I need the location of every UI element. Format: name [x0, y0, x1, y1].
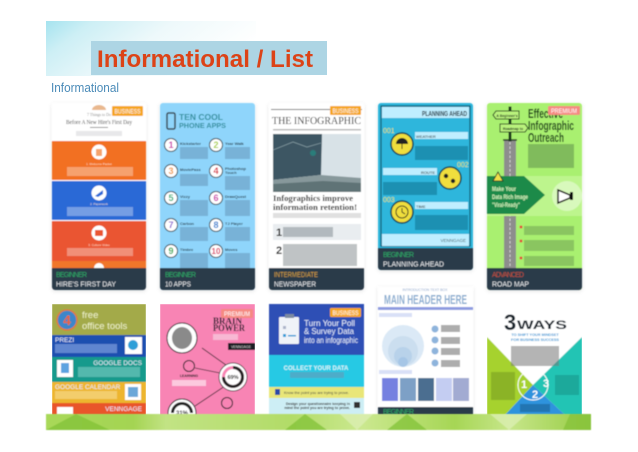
panel: brain power: BRAIN — [213, 317, 242, 327]
title: Informational / List — [97, 46, 313, 73]
icons — [92, 144, 106, 240]
panel: road map: Roadmap to — [503, 127, 523, 131]
panel: 10 apps: TEN COOL — [179, 112, 223, 122]
panel: office tools: PREZI — [55, 337, 74, 344]
panel: 10 apps: PHONE APPS — [179, 121, 226, 130]
panel: road map: A Beginner's — [496, 114, 518, 118]
panel: poll and survey: COLLECT YOUR DATA — [284, 366, 349, 372]
panel: hire's first day — [52, 103, 146, 290]
numbered list: 5 — [168, 193, 174, 203]
label bar: HIRE'S FIRST DAY — [56, 280, 116, 288]
panel: newspaper — [269, 103, 364, 290]
panel: 3 ways: 3 — [543, 378, 549, 390]
label bar: INTERMEDIATE — [274, 272, 318, 279]
label bar — [378, 248, 473, 270]
section heading: Informational — [51, 81, 119, 95]
numbered list: 2 — [213, 140, 219, 150]
panel: 10 apps: Photoshop — [225, 166, 246, 171]
panel: newspaper: THE INFOGRAPHIC — [272, 116, 361, 127]
header gradient background — [46, 21, 256, 76]
panel: newspaper: 2 — [276, 245, 282, 257]
panel: hire's first day: 7 Things to Do — [87, 112, 111, 117]
panel: 3 ways: WAYS — [517, 320, 567, 332]
panel: newspaper: information retention! — [273, 203, 357, 212]
panel: planning ahead: 002 — [457, 162, 469, 169]
tag: BUSINESS — [332, 310, 359, 317]
panel: planning ahead: TIME — [416, 204, 426, 209]
panel: planning ahead: VENNGAGE — [440, 238, 466, 243]
panel: hire's first day: 3. Culture Video — [88, 243, 110, 247]
panel: 3 ways: FOR BUSINESS SUCCESS — [511, 338, 559, 342]
panel: 10 apps: TJ Player — [225, 221, 243, 226]
arrow banner: Make Your — [492, 187, 517, 193]
panel: brain power — [160, 304, 255, 427]
panel: hire's first day: Before A New Hire's First Day — [66, 119, 133, 126]
panel: planning ahead: 003 — [383, 197, 395, 204]
panel: planning ahead: WEATHER — [416, 134, 436, 139]
arrow banner: Data Rich Image — [492, 195, 529, 201]
photo — [273, 134, 361, 192]
icon: umbrella — [391, 133, 413, 155]
panel: road map: Infographic — [528, 119, 574, 133]
label bar — [52, 268, 146, 290]
numbered list: 8 — [213, 220, 219, 230]
arrow banner — [487, 176, 545, 214]
tag: BUSINESS — [332, 108, 359, 115]
panel: 3 ways: 2 — [532, 389, 538, 401]
panel: 3 ways — [487, 305, 582, 415]
numbered list — [164, 138, 222, 258]
panel: 10 apps: MoviePass — [180, 167, 201, 172]
panel: poll and survey: Design your questionnaire keeping in — [286, 402, 350, 406]
donut: 31%: 31% — [176, 411, 189, 417]
panel: poll and survey — [269, 304, 364, 415]
panel: office tools: GOOGLE DOCS — [93, 360, 143, 367]
panel: planning ahead: 001 — [383, 128, 395, 135]
panel: road map — [487, 103, 582, 290]
panel: office tools: 4 — [63, 312, 71, 328]
panel: 10 apps — [160, 103, 255, 290]
panel: brain power: POWER — [213, 324, 245, 334]
donut: 69%: 69% — [227, 375, 239, 381]
panel: brain power: LEARNING — [180, 374, 198, 378]
tag: PREMIUM — [224, 311, 250, 318]
panel: newspaper: Infographics improve — [273, 194, 353, 203]
panel: 3 ways: TO SHIFT YOUR MINDSET — [511, 333, 559, 337]
numbered list: 7 — [168, 220, 174, 230]
panel: road map: Outreach — [528, 131, 564, 145]
numbered list: 1 — [168, 140, 174, 150]
panel: brain power: VENNGAGE — [231, 345, 252, 349]
footer green band — [46, 414, 591, 430]
label bar: BEGINNER — [165, 272, 196, 279]
icon: clock — [391, 201, 413, 223]
panel: main header: MAIN HEADER HERE — [384, 292, 467, 307]
arrow banner: "Viral-Ready" — [492, 203, 520, 209]
panel: 10 apps: Year Walk — [225, 141, 245, 146]
tag — [112, 106, 143, 116]
numbered list: 10 — [212, 247, 221, 256]
panel: hire's first day: 2. Paperwork — [90, 202, 108, 206]
label bar: PLANNING AHEAD — [383, 260, 445, 268]
panel: office tools: office tools — [82, 321, 127, 332]
signpost — [493, 107, 528, 141]
panel: office tools: free — [82, 310, 98, 321]
panel: 10 apps: Carbon — [180, 221, 195, 226]
label bar: ROAD MAP — [492, 280, 529, 288]
label bar — [487, 268, 582, 290]
label bar: NEWSPAPER — [274, 280, 317, 288]
panel: 10 apps: Vizzy — [180, 194, 191, 199]
panel: poll and survey: Turn Your Poll — [304, 318, 355, 328]
panel: poll and survey: mind the point you are trying to prove. — [284, 406, 350, 410]
panel: office tools — [52, 304, 146, 415]
icon: brain — [167, 323, 197, 353]
bubble chart — [382, 325, 460, 367]
tag: BUSINESS — [114, 108, 141, 116]
panel: main header: INTRODUCTION TEXT BOX — [402, 288, 448, 292]
panel: office tools: VENNGAGE — [105, 406, 143, 413]
panel: poll and survey: into an infographic — [304, 335, 359, 345]
panel: 10 apps: Touch — [225, 170, 237, 175]
panel: hire's first day: 1. Welcome Packet — [86, 162, 112, 166]
numbered list: 3 — [168, 166, 174, 176]
panel: 3 ways: 3 — [504, 310, 516, 335]
panel: office tools: GOOGLE CALENDAR — [55, 384, 121, 391]
panel: poll and survey: Know the point you are trying to prove. — [284, 391, 349, 395]
numbered list: 6 — [213, 193, 219, 203]
numbered list: 9 — [168, 246, 174, 256]
panel: 3 ways: 1 — [521, 379, 527, 391]
panel: 10 apps: Kickstarter — [180, 141, 201, 146]
label bar: BEGINNER — [383, 252, 414, 259]
panel: main header — [378, 287, 473, 416]
panel: 10 apps: Moves — [225, 247, 238, 252]
panel: planning ahead: PLANNING AHEAD — [422, 109, 467, 118]
panel: planning ahead — [378, 103, 473, 270]
numbered list: 4 — [213, 166, 219, 176]
label bar: BEGINNER — [383, 409, 414, 416]
panel: poll and survey: & Survey Data — [304, 326, 354, 336]
panel: planning ahead: ROUTE — [421, 170, 435, 175]
tag: PREMIUM — [551, 108, 577, 115]
icon: megaphone — [552, 181, 582, 211]
swatches — [382, 378, 469, 401]
label bar: 10 APPS — [165, 280, 191, 288]
label bar — [160, 268, 255, 290]
icon: pins — [439, 167, 461, 189]
panel: 10 apps: Timbre — [180, 247, 194, 252]
panel: road map: Effective — [528, 107, 563, 121]
label bar: BEGINNER — [56, 272, 87, 279]
panel: newspaper: 1 — [276, 227, 282, 239]
tag — [548, 106, 580, 115]
label bar: ADVANCED — [492, 272, 524, 279]
label bar — [269, 268, 364, 290]
icon: warning — [493, 172, 503, 181]
panel: 10 apps: DrawQuest — [225, 194, 247, 199]
tag — [330, 106, 361, 115]
